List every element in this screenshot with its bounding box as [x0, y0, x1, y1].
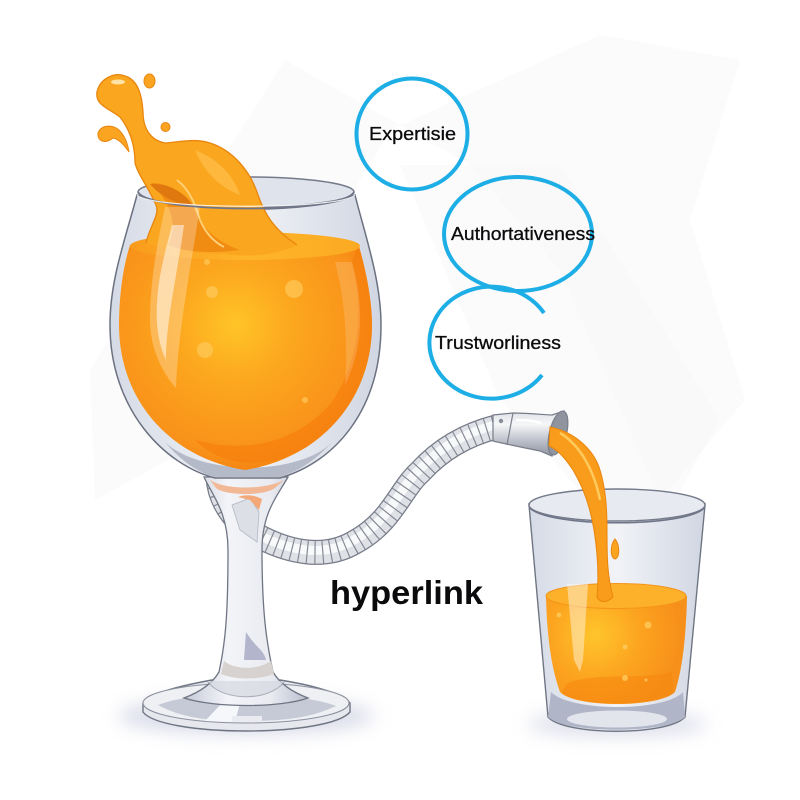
- circle: Authortativeness: [444, 177, 595, 291]
- bubbles: [197, 259, 308, 403]
- bowl glass: [110, 195, 381, 478]
- right highlight: [335, 262, 360, 385]
- darker juice edge: [195, 243, 372, 463]
- splash: [97, 75, 297, 256]
- rim front: [529, 507, 705, 523]
- circle: Trustworliness: [429, 287, 561, 399]
- stem and base: [143, 477, 350, 731]
- splash sheen: [195, 150, 240, 195]
- rim front: [138, 192, 354, 208]
- juice surface: [130, 232, 360, 260]
- shadow: tumbler base: [527, 712, 707, 736]
- glass foot: [143, 680, 350, 731]
- tumbler body: [529, 505, 705, 731]
- bottom juice shade: [562, 672, 673, 704]
- circle: Authortativeness: Authortativeness: [451, 224, 595, 244]
- juice in bowl: [119, 243, 372, 470]
- droplet: [144, 74, 155, 88]
- hose passing behind the stem: [217, 425, 496, 552]
- splash lower lobe: [152, 183, 240, 252]
- background shapes: [90, 35, 745, 560]
- juice surface: [546, 584, 686, 608]
- circle: Expertisie: Expertisie: [369, 124, 456, 144]
- rim back: [138, 177, 354, 207]
- stem: [184, 477, 308, 706]
- shadow: wine glass base: [118, 698, 374, 734]
- bubbles: [556, 612, 652, 682]
- glass highlight left: [150, 207, 200, 388]
- splash droplet: [98, 126, 129, 152]
- droplet: [161, 122, 170, 132]
- bowl bottom shade: [165, 442, 332, 477]
- wine glass: [97, 74, 381, 731]
- splash outline: [97, 75, 297, 245]
- nozzle: [493, 409, 572, 457]
- stem knob arc: [207, 681, 285, 697]
- falling drop: [611, 539, 619, 559]
- tumbler: [529, 489, 705, 731]
- splash dark hollow: [150, 184, 192, 204]
- circle: Trustworliness: Trustworliness: [435, 333, 561, 353]
- circle: Expertisie: [356, 78, 468, 190]
- pouring stream: [549, 427, 613, 602]
- glass highlight core: [157, 225, 184, 360]
- juice in tumbler: [546, 596, 687, 704]
- tumbler highlight: [567, 584, 588, 672]
- splash highlight line: [177, 180, 224, 247]
- rim back: [529, 489, 705, 521]
- tumbler base: [548, 692, 685, 730]
- hose seen through stem: [232, 498, 259, 542]
- label: hyperlink: hyperlink: [330, 574, 484, 611]
